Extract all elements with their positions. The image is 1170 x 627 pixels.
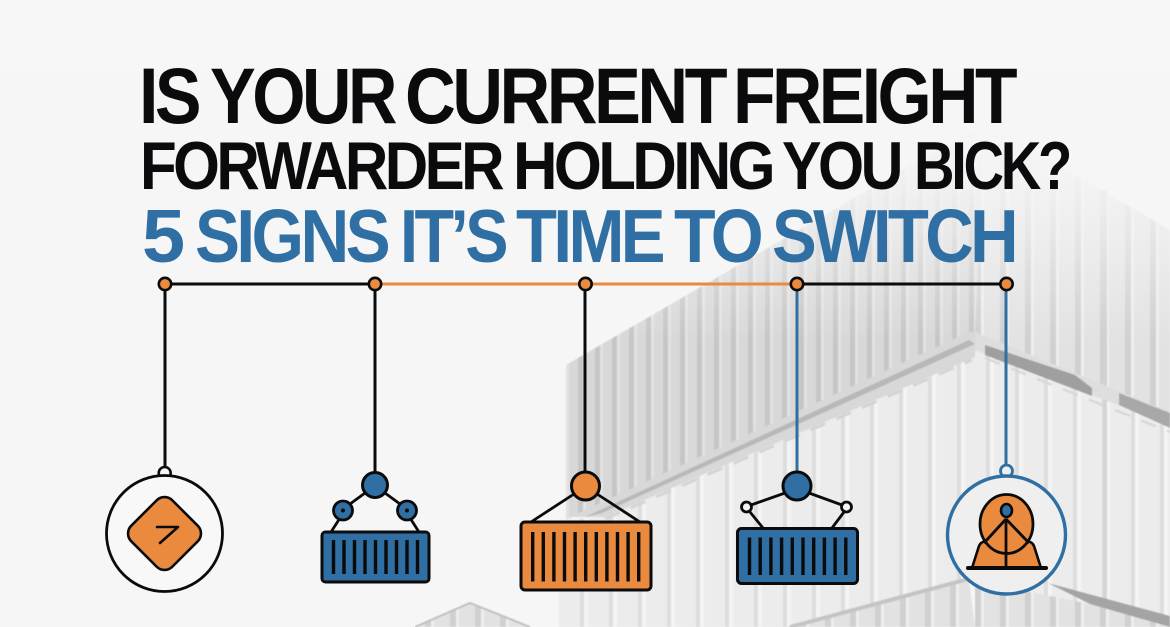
node 5 xyxy=(1000,278,1013,290)
hanger line 1 xyxy=(164,290,166,468)
node 3 xyxy=(579,278,592,290)
title xyxy=(139,51,1069,278)
container: bottom right face xyxy=(975,581,1170,627)
hanger line 2 xyxy=(374,290,376,474)
timeline: orange middle segment xyxy=(375,282,797,286)
container rail: left xyxy=(570,332,975,517)
node 1 xyxy=(159,278,171,290)
photo: stacked shipping containers xyxy=(415,110,1170,627)
container rail: right shadow xyxy=(985,345,1092,396)
icon 2: blue container with crane arms xyxy=(322,472,429,582)
title line 2: YOU xyxy=(782,128,900,204)
icon 3: orange container xyxy=(521,472,651,590)
subtitle: TO xyxy=(674,194,762,278)
timeline connector xyxy=(165,284,1006,474)
title line 2 xyxy=(140,128,1069,204)
timeline nodes xyxy=(159,278,1013,290)
hanger line 3 xyxy=(584,290,586,473)
container rail: right xyxy=(975,332,1170,425)
title line 1: YOUR xyxy=(210,51,397,140)
node 4 xyxy=(791,278,803,290)
container: upper left face xyxy=(566,122,985,520)
container: bottom left face xyxy=(787,580,975,627)
icon 5: wheel on base in blue circle xyxy=(948,465,1066,594)
title line 2: BICK? xyxy=(914,128,1069,204)
fade over upper containers xyxy=(560,110,1170,340)
subtitle: TIME xyxy=(516,194,664,278)
icon 1: diamond arrow in circle xyxy=(106,467,222,592)
container: middle left face xyxy=(558,357,975,627)
container: upper right face xyxy=(975,122,1170,425)
container: small distant top xyxy=(415,603,530,627)
title line 2: FORWARDER xyxy=(140,128,504,204)
subtitle: SIGNS xyxy=(195,194,389,278)
hanger line 5 xyxy=(1004,290,1008,466)
title line 2: HOLDING xyxy=(513,128,772,204)
title line 1: FREIGHT xyxy=(733,51,1017,140)
title line 1 xyxy=(139,51,1017,140)
subtitle: IT’S xyxy=(400,194,507,278)
subtitle xyxy=(142,194,1015,278)
timeline: black right segment xyxy=(797,282,1006,286)
node 2 xyxy=(369,278,381,290)
subtitle: 5 xyxy=(142,194,183,278)
container: middle right face xyxy=(975,345,1170,627)
title line 1: CURRENT xyxy=(405,51,727,140)
timeline: black left segment xyxy=(165,282,375,286)
hanger line 4 xyxy=(796,290,798,473)
icon 4: blue container with open joints xyxy=(738,472,858,584)
subtitle: SWITCH xyxy=(772,194,1015,278)
title line 1: IS xyxy=(139,51,199,140)
